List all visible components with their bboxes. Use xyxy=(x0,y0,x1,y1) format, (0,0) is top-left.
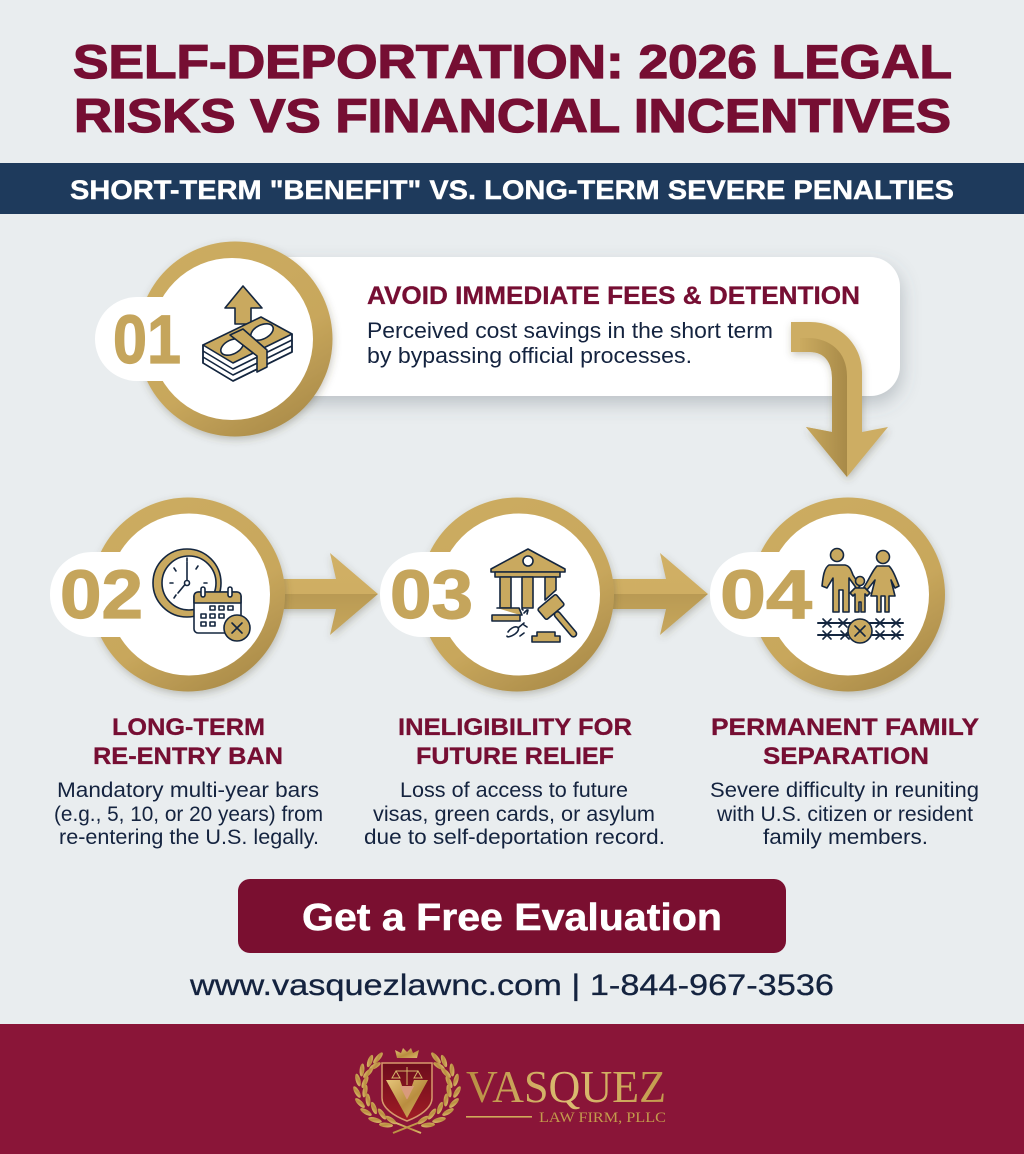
step 04 description: with U.S. citizen or resident xyxy=(716,803,973,826)
step 02 heading: RE-ENTRY BAN xyxy=(93,743,283,770)
logo laurel wreath xyxy=(352,1051,462,1133)
logo wordmark: VASQUEZ xyxy=(466,1061,666,1112)
step 02 heading: LONG-TERM xyxy=(112,714,265,741)
step 01 badge xyxy=(95,242,332,436)
call to action button: Get a Free Evaluation xyxy=(302,897,722,939)
icon: money stack with up arrow xyxy=(203,286,292,381)
step 02 description: (e.g., 5, 10, or 20 years) from xyxy=(54,803,323,826)
icon: clock and calendar xyxy=(153,549,250,641)
step 03 heading: INELIGIBILITY FOR xyxy=(398,714,632,741)
step 03 badge xyxy=(380,498,614,692)
step 02 description: re-entering the U.S. legally. xyxy=(59,826,319,849)
step 03 text xyxy=(364,714,665,849)
step 04 description: Severe difficulty in reuniting xyxy=(710,779,979,802)
step 03 description: due to self-deportation record. xyxy=(364,826,665,849)
step 03 heading: FUTURE RELIEF xyxy=(416,743,614,770)
subtitle banner: SHORT-TERM "BENEFIT" VS. LONG-TERM SEVERE PENALTIES xyxy=(70,175,954,205)
step 04 heading: PERMANENT FAMILY xyxy=(711,714,979,741)
step 02 heading xyxy=(93,714,283,770)
title xyxy=(73,36,952,143)
card: step 01 xyxy=(230,257,900,396)
step 03 description xyxy=(364,779,665,849)
logo V and scales xyxy=(386,1067,428,1118)
title: SELF-DEPORTATION: 2026 LEGAL xyxy=(73,36,952,89)
step 02 badge: 02 xyxy=(60,556,143,633)
logo crown xyxy=(395,1048,419,1058)
logo shield xyxy=(382,1063,432,1121)
logo: Vasquez Law Firm: LAW FIRM, PLLC xyxy=(539,1110,666,1126)
step 04 description: family members. xyxy=(763,826,928,849)
arrow: step 02 to 03 xyxy=(280,553,378,635)
step 02 description xyxy=(54,779,323,849)
step 01 text xyxy=(367,318,773,368)
step 04 heading xyxy=(711,714,979,770)
arrow: curved from step 01 to step 04 xyxy=(791,322,888,477)
footer band xyxy=(0,1024,1024,1154)
step 04 description xyxy=(710,779,979,849)
call to action button xyxy=(238,879,786,953)
logo: Vasquez Law Firm xyxy=(352,1048,666,1133)
step 02 description: Mandatory multi-year bars xyxy=(57,779,319,802)
icon: family separated by barbed wire xyxy=(818,548,903,643)
step 04 badge: 04 xyxy=(720,556,812,633)
step 02 badge xyxy=(50,498,285,692)
step 04 text xyxy=(710,714,979,849)
title: RISKS VS FINANCIAL INCENTIVES xyxy=(74,90,951,143)
step 03 description: visas, green cards, or asylum xyxy=(373,803,655,826)
subtitle banner xyxy=(0,163,1024,214)
step 01 badge: 01 xyxy=(113,301,181,378)
step 02 text xyxy=(54,714,323,849)
arrow: step 03 to 04 xyxy=(610,553,708,635)
step 01 text: by bypassing official processes. xyxy=(367,343,692,368)
icon: courthouse, gavel and broken chain xyxy=(491,549,585,644)
step 01 panel xyxy=(95,242,900,436)
step 01 text: Perceived cost savings in the short term xyxy=(367,318,773,343)
step 03 description: Loss of access to future xyxy=(400,779,628,802)
step 03 heading xyxy=(398,714,632,770)
step 01 heading: AVOID IMMEDIATE FEES & DETENTION xyxy=(367,282,860,310)
step 04 badge xyxy=(710,498,945,692)
step 03 badge: 03 xyxy=(390,556,473,633)
contact line: www.vasquezlawnc.com | 1-844-967-3536 xyxy=(189,969,834,1002)
step 04 heading: SEPARATION xyxy=(763,743,929,770)
